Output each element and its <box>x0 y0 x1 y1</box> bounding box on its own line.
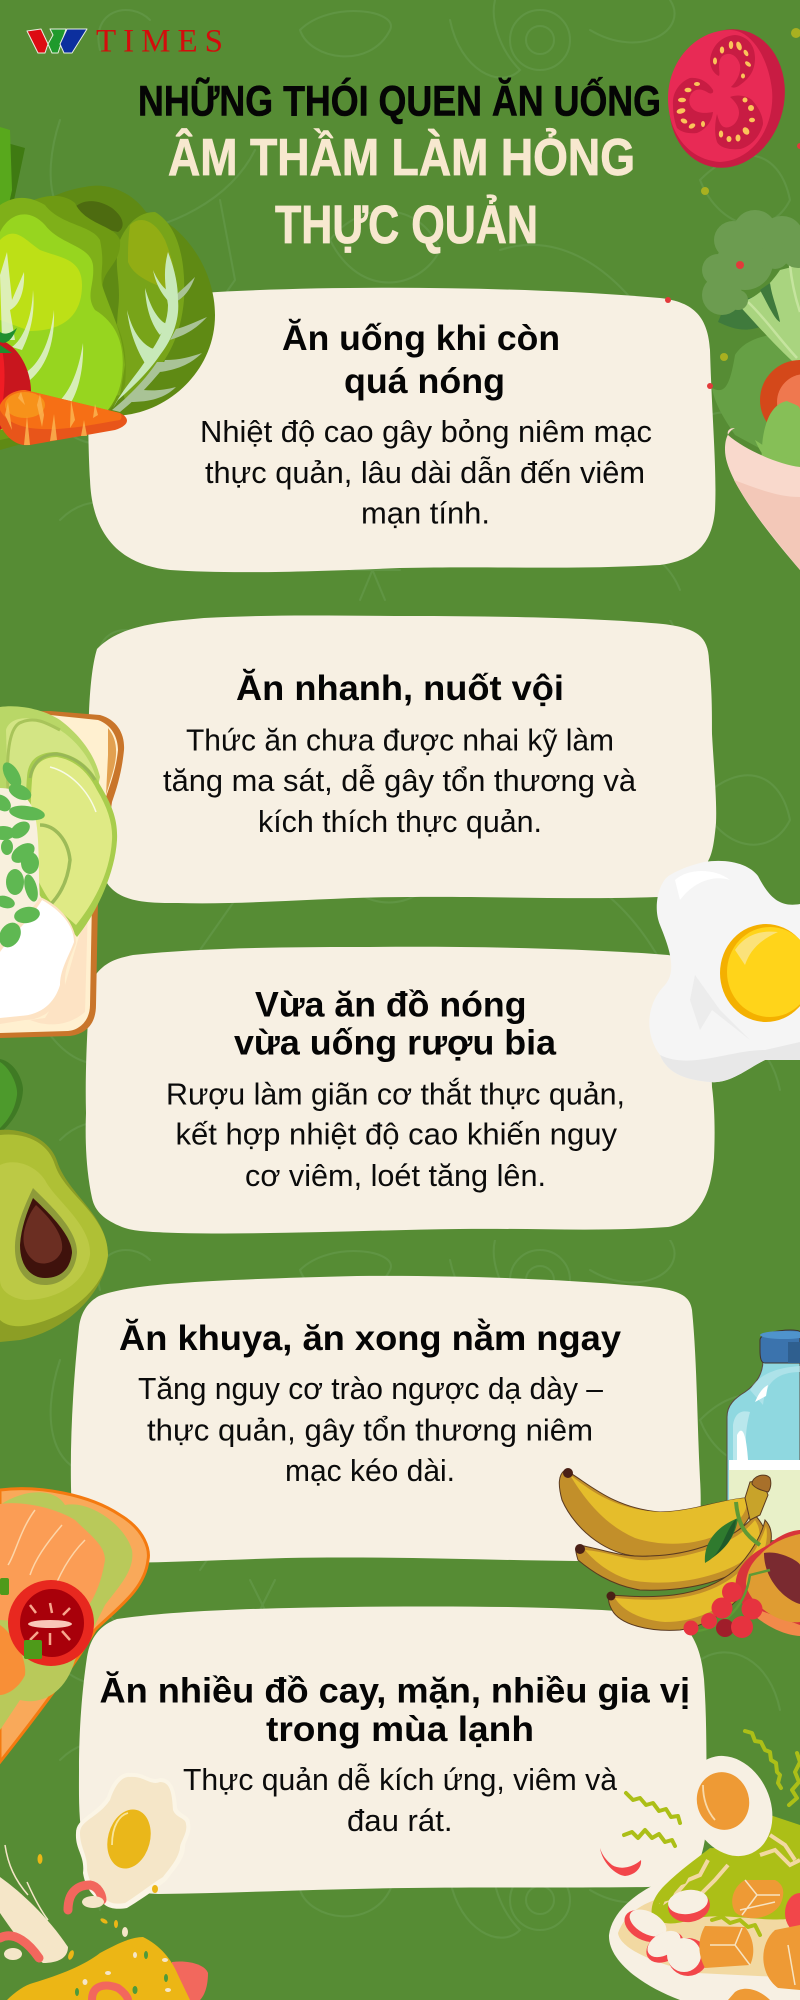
heading: quá nóng <box>344 362 505 401</box>
lettuce front <box>762 401 800 475</box>
body text: Tăng nguy cơ trào ngược dạ dày – <box>138 1371 604 1406</box>
body text: cơ viêm, loét tăng lên. <box>245 1158 546 1193</box>
icon: small avocado half <box>0 1059 23 1133</box>
body text <box>200 414 652 530</box>
body text: Nhiệt độ cao gây bỏng niêm mạc <box>200 414 652 449</box>
icon: noodle salad plate <box>600 1731 800 2000</box>
title line 3: THỰC QUẢN <box>275 195 538 255</box>
small decorative dots <box>665 28 800 389</box>
icon: salad bowl with broccoli <box>702 210 800 570</box>
right pale veins <box>113 252 178 408</box>
panel: eating while too hot <box>88 288 715 572</box>
noodle strands <box>660 1835 800 1905</box>
tomato in bowl <box>760 360 800 440</box>
panel: hot food with alcohol <box>86 947 715 1233</box>
broccoli stem <box>737 265 800 368</box>
body text: thực quản, lâu dài dẫn đến viêm <box>205 455 645 490</box>
squiggles <box>624 1731 800 1935</box>
title line 1: NHỮNG THÓI QUEN ĂN UỐNG <box>138 76 661 126</box>
icon: fried egg right <box>649 861 800 1082</box>
heading: trong mùa lạnh <box>266 1710 534 1749</box>
body text <box>138 1371 604 1488</box>
body text <box>183 1762 618 1838</box>
left pale veins <box>0 252 83 410</box>
panel: late night eating <box>71 1276 701 1563</box>
radish slices <box>619 1887 800 1976</box>
back avocado slice <box>0 706 100 880</box>
icon: shrimp and noodles <box>0 1845 158 1963</box>
icon: milk bottle <box>727 1330 800 1540</box>
green noodles <box>652 1815 800 1923</box>
lettuce back <box>712 330 800 470</box>
icon: avocado toast <box>0 706 124 1038</box>
body text: Rượu làm giãn cơ thắt thực quản, <box>166 1076 625 1112</box>
toast crust <box>0 711 124 1038</box>
body text <box>163 722 637 839</box>
body text: Thực quản dễ kích ứng, viêm và <box>183 1762 618 1797</box>
body text: mạc kéo dài. <box>285 1453 455 1488</box>
salmon slice <box>0 1503 105 1625</box>
icon: green leaf top left <box>0 127 25 245</box>
broccoli shadow <box>718 295 775 330</box>
panel: eating fast <box>88 616 716 903</box>
bowl <box>725 428 800 570</box>
right shaded veins <box>112 277 207 412</box>
poached egg <box>0 897 76 1024</box>
icon: fried egg bottom left <box>76 1773 190 1909</box>
avocado spread <box>0 1492 132 1730</box>
body text: mạn tính. <box>361 496 490 530</box>
tofu cubes <box>699 1880 800 2000</box>
icon: avocado <box>0 1130 108 1342</box>
icon: plum half <box>736 1530 800 1636</box>
seeds <box>676 41 755 142</box>
panel: spicy salty food in winter <box>79 1606 707 1894</box>
radish piece <box>600 1848 641 1876</box>
front avocado slice <box>26 752 117 937</box>
heading <box>100 1672 690 1749</box>
heading: vừa uống rượu bia <box>234 1024 557 1062</box>
body text: đau rát. <box>347 1803 452 1838</box>
heading: Vừa ăn đồ nóng <box>255 986 526 1024</box>
body text <box>166 1076 625 1193</box>
icon: red currants <box>684 1570 770 1638</box>
body text: Thức ăn chưa được nhai kỹ làm <box>186 722 614 758</box>
icon: tomato slice <box>655 17 799 180</box>
heading: Ăn nhiều đồ cay, mặn, nhiều gia vị <box>100 1672 690 1711</box>
icon: fried rice bowl <box>7 1937 208 2000</box>
heading: Ăn uống khi còn <box>282 319 560 358</box>
body text: kết hợp nhiệt độ cao khiến nguy <box>176 1117 617 1152</box>
heading <box>282 319 560 401</box>
icon: cabbage <box>0 186 215 450</box>
icon: carrot <box>0 390 127 445</box>
broccoli crown <box>702 210 800 315</box>
heading: Ăn nhanh, nuốt vội <box>236 669 564 708</box>
sprouts <box>0 759 46 951</box>
body text: kích thích thực quản. <box>258 804 542 839</box>
body text: tăng ma sát, dễ gây tổn thương và <box>163 763 637 798</box>
title <box>138 76 661 255</box>
logo: VTV Times <box>27 24 223 60</box>
seed chambers <box>673 35 763 149</box>
pepper piece <box>24 1640 42 1659</box>
icon: VTV mark <box>27 29 87 53</box>
icon: red tomato behind carrot <box>0 328 31 430</box>
title line 2: ÂM THẦM LÀM HỎNG <box>168 128 635 187</box>
heading <box>234 986 557 1062</box>
icon: bananas <box>559 1468 771 1630</box>
boiled egg <box>672 1742 788 1870</box>
wordmark: TIMES <box>96 24 223 60</box>
lower salmon slice <box>0 1625 25 1695</box>
icon: salmon toast <box>0 1489 148 1762</box>
heading: Ăn khuya, ăn xong nằm ngay <box>119 1318 622 1358</box>
body text: thực quản, gây tổn thương niêm <box>147 1413 593 1448</box>
icon: banana leaf <box>705 1502 760 1563</box>
cream under sprouts <box>0 788 40 955</box>
plate <box>609 1830 800 2000</box>
tomato slice <box>8 1580 94 1666</box>
